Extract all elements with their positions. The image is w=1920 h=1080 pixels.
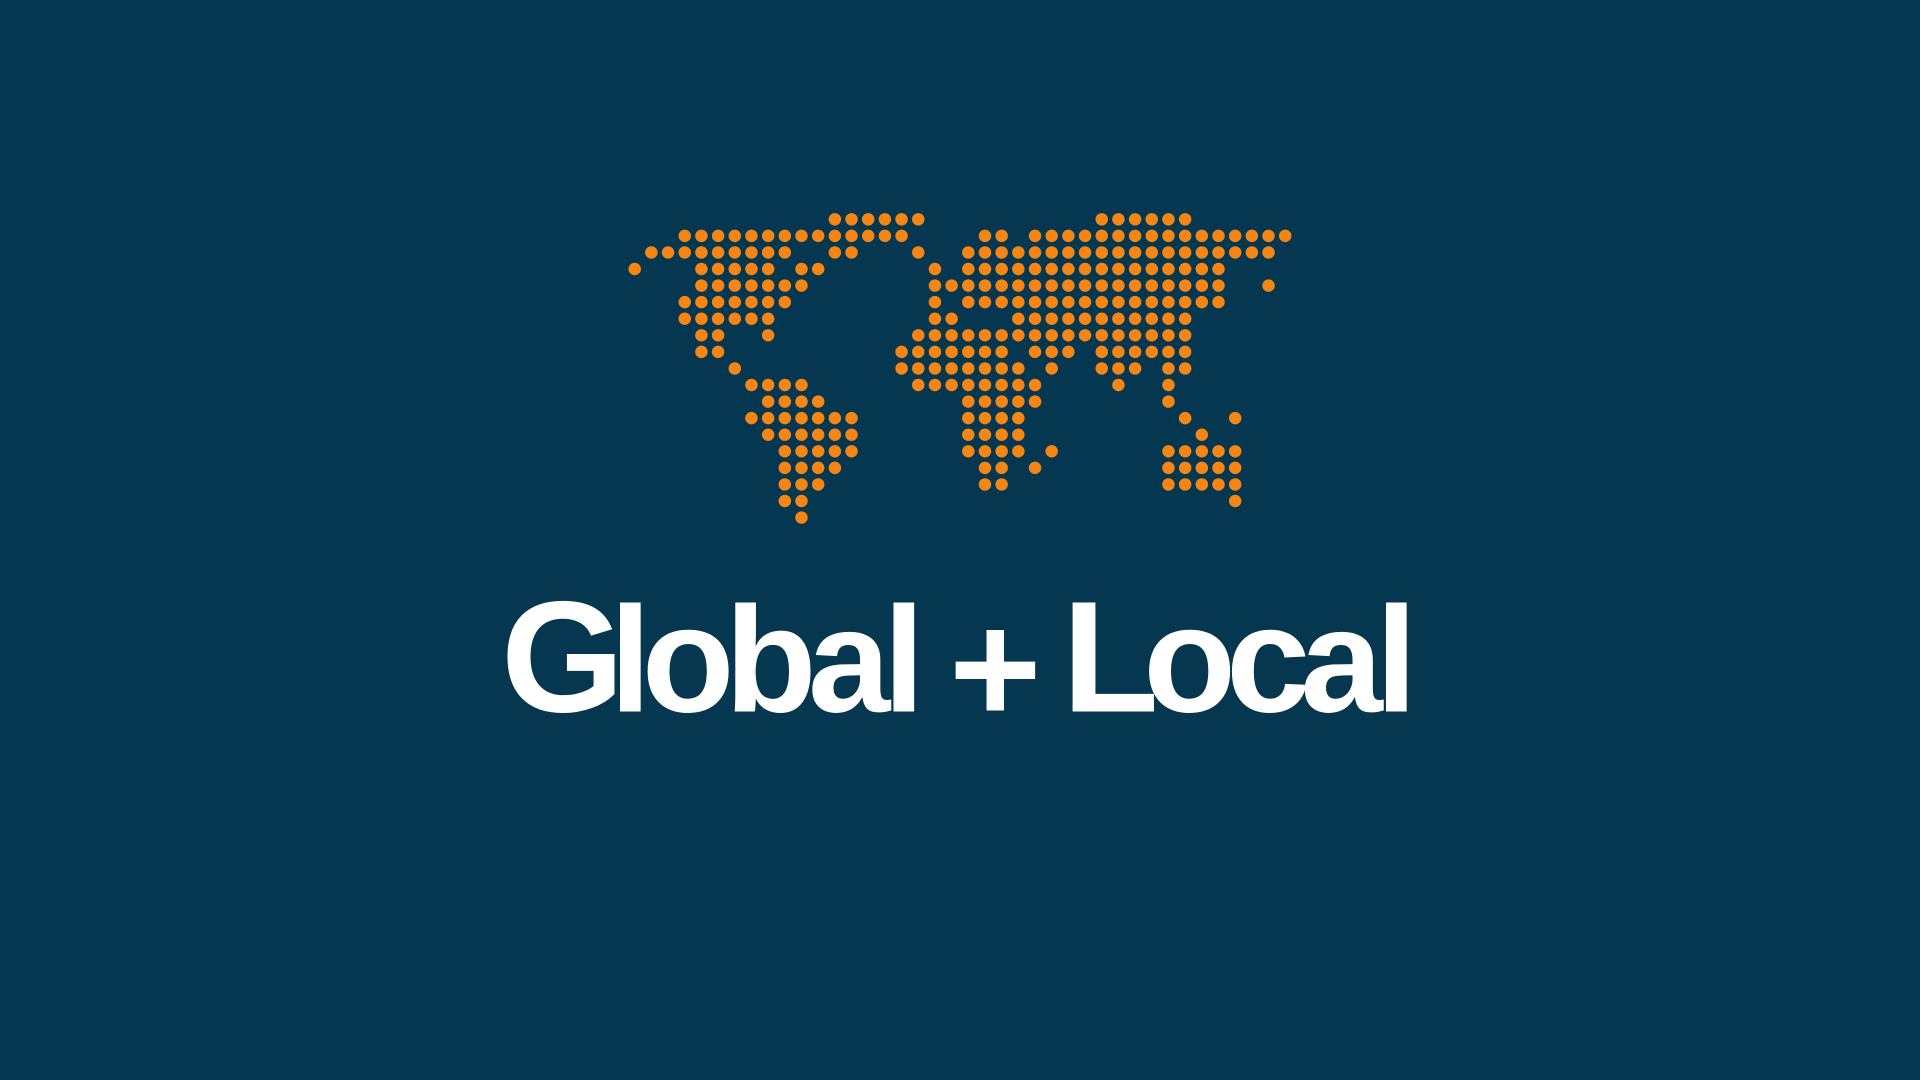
Oceania dots xyxy=(1168,418,1235,501)
Africa dots xyxy=(902,335,1052,484)
South America dots xyxy=(751,385,852,518)
Europe and Asia dots xyxy=(935,219,1285,402)
North America and Greenland dots xyxy=(635,219,918,368)
dotted world map xyxy=(635,219,1285,518)
title: Global + Local xyxy=(501,568,1417,757)
